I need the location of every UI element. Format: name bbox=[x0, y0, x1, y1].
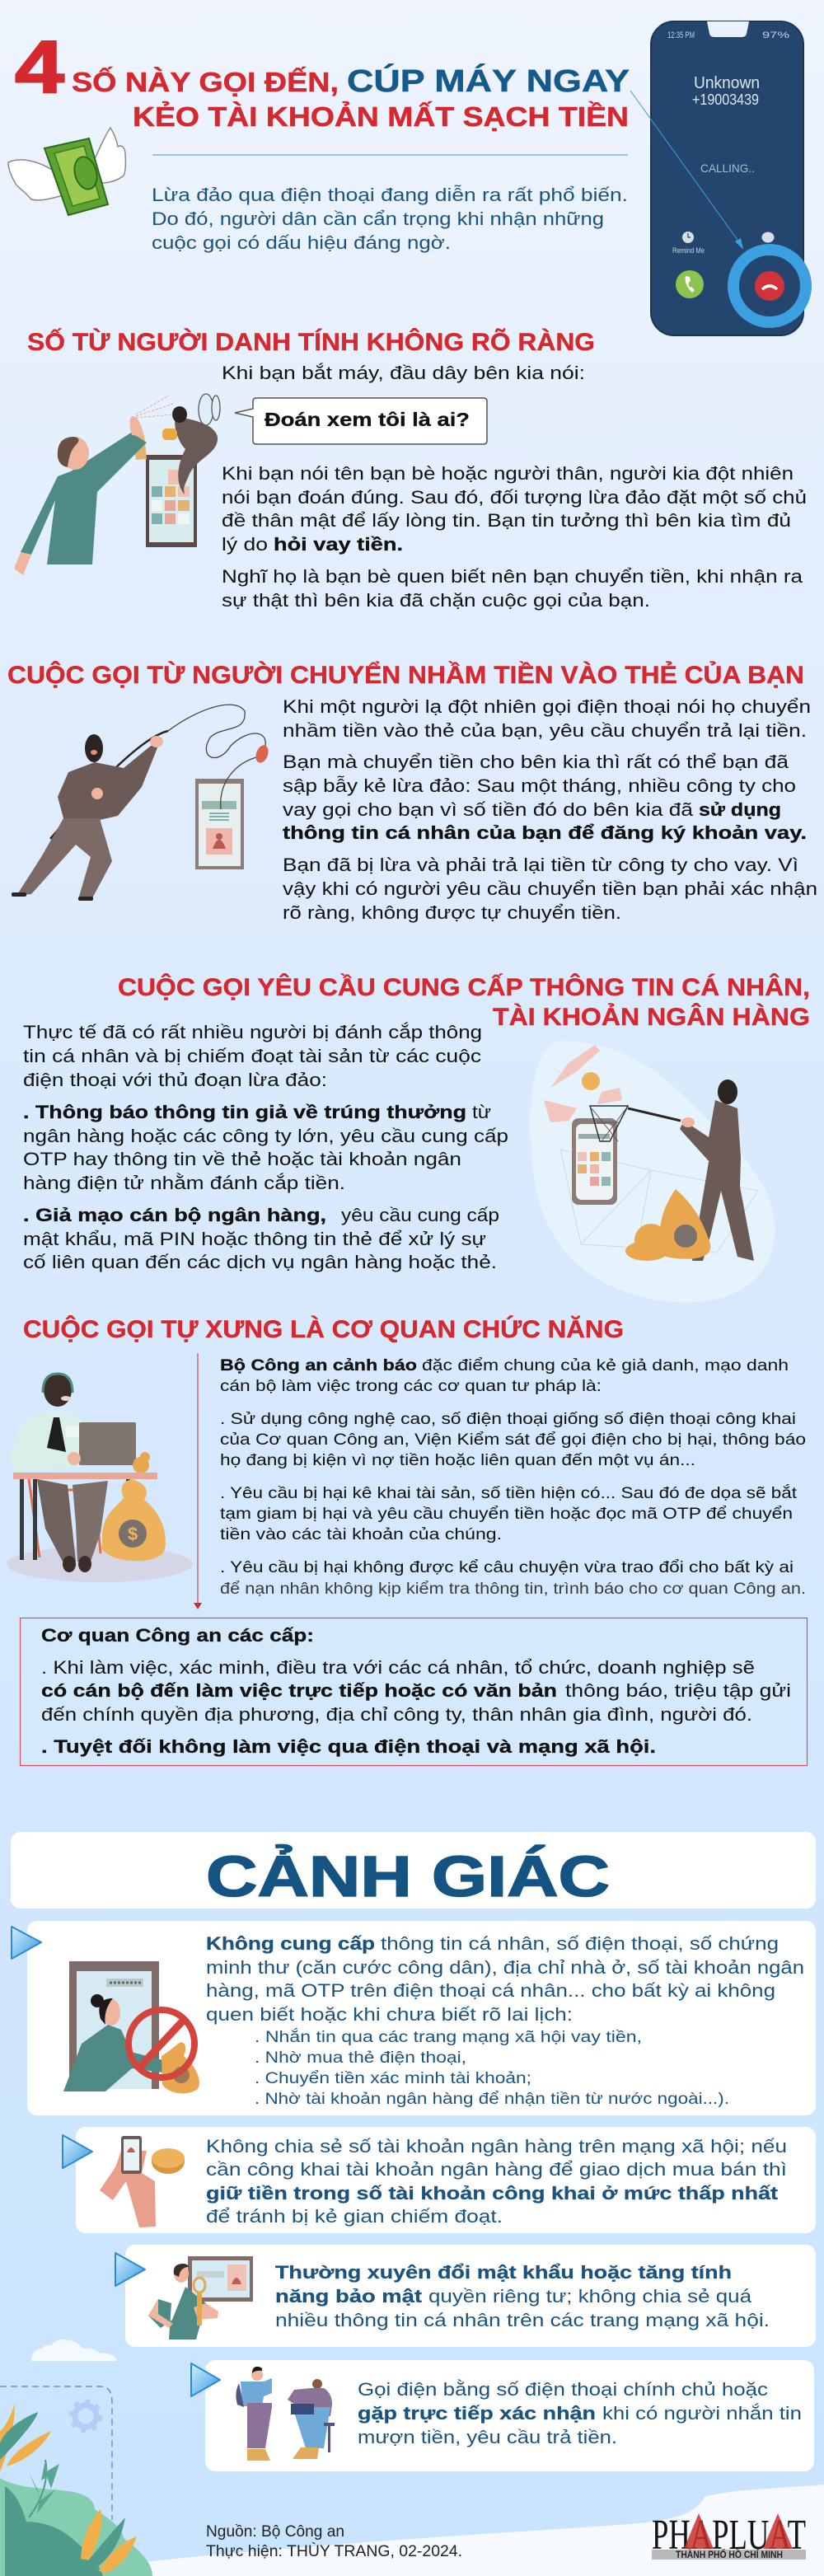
title line 2: KẺO TÀI KHOẢN MẤT SẠCH TIỀN bbox=[133, 101, 629, 132]
body text: hàng điện tử nhằm đánh cắp tiền. bbox=[23, 1173, 345, 1193]
icon: arrow marker bbox=[191, 2363, 220, 2396]
logo: Pháp Luật: THÀNH PHỐ HỒ CHÍ MINH bbox=[676, 2548, 783, 2560]
callout: police notice box: đến chính quyền địa phương, địa chỉ công ty, thân nhân gia đình, người đó. bbox=[41, 1704, 752, 1725]
body text: cán bộ làm việc trong các cơ quan tư pháp là: bbox=[220, 1378, 602, 1395]
icon: phone call screen: 12:35 PM bbox=[667, 30, 695, 40]
icon: arrow marker bbox=[115, 2253, 145, 2286]
icon: phone call screen: Remind Me bbox=[672, 246, 705, 255]
tip text: cần công khai tài khoản ngân hàng để giao dịch mua bán thì bbox=[206, 2159, 787, 2180]
heading: CUỘC GỌI TỪ NGƯỜI CHUYỂN NHẦM TIỀN VÀO THẺ CỦA BẠN bbox=[7, 661, 804, 689]
body text: Nghĩ họ là bạn bè quen biết nên bạn chuyển tiền, khi nhận ra bbox=[222, 566, 803, 587]
body text: . Sử dụng công nghệ cao, số điện thoại giống số điện thoại công khai bbox=[220, 1411, 796, 1428]
arrow: vertical red bbox=[194, 1353, 202, 1609]
icon: flying money bbox=[8, 128, 125, 215]
illustration: plants bottom left bbox=[0, 2404, 152, 2576]
body text: hỏi vay tiền. bbox=[274, 534, 403, 555]
tip text: . Chuyển tiền xác minh tài khoản; bbox=[255, 2070, 531, 2087]
body text: điện thoại với thủ đoạn lừa đảo: bbox=[23, 1070, 327, 1090]
icon: phone call screen: 97% bbox=[762, 30, 789, 40]
icon: arrow marker bbox=[63, 2135, 92, 2168]
callout bubble: Đoán xem tôi là ai? bbox=[265, 409, 470, 430]
illustration: man with key bbox=[148, 2256, 253, 2339]
body text: sử dụng bbox=[699, 799, 781, 820]
illustration: two people talking bbox=[236, 2367, 335, 2461]
panel: unknown identity bbox=[14, 328, 807, 611]
arrow: pointer to hang-up button bbox=[630, 91, 743, 250]
tip text: để tránh bị kẻ gian chiếm đoạt. bbox=[206, 2206, 503, 2227]
body text: Khi bạn nói tên bạn bè hoặc người thân, người kia đột nhiên bbox=[222, 463, 794, 484]
body text: ngân hàng hoặc các công ty lớn, yêu cầu cung cấp bbox=[23, 1126, 508, 1146]
callout bubble bbox=[235, 398, 487, 444]
body text: của Cơ quan Công an, Viện Kiểm sát để gọi điện cho bị hại, thông báo bbox=[220, 1431, 806, 1449]
body text: nhầm tiền vào thẻ của bạn, yêu cầu chuyển trả lại tiền. bbox=[283, 720, 807, 741]
illustration: woman and prohibited sign bbox=[63, 1961, 199, 2093]
tip text: Thường xuyên đổi mật khẩu hoặc tăng tính bbox=[275, 2262, 732, 2283]
tip text: hàng, mã OTP trên điện thoại cá nhân... cho bất kỳ ai không bbox=[206, 1980, 775, 2001]
title line 1 red: SỐ NÀY GỌI ĐẾN, bbox=[72, 66, 339, 97]
source credits: Thực hiện: THÙY TRANG, 02-2024. bbox=[206, 2542, 462, 2560]
illustration: man and fly scammer bbox=[14, 394, 220, 575]
tip text: khi có người nhắn tin bbox=[602, 2403, 802, 2424]
panel: cảnh giác title: CẢNH GIÁC bbox=[206, 1844, 610, 1909]
title line 1 blue: CÚP MÁY NGAY bbox=[347, 63, 630, 99]
body text: Thực tế đã có rất nhiều người bị đánh cắp thông bbox=[23, 1022, 482, 1042]
body text: tiền vào các tài khoản của chúng. bbox=[220, 1526, 502, 1543]
body text: Bạn đã bị lừa và phải trả lại tiền từ công ty cho vay. Vì bbox=[283, 855, 798, 875]
icon: phone call screen: +19003439 bbox=[692, 91, 759, 108]
tip text: quen biết hoặc khi chưa biết rõ lai lịch: bbox=[206, 2004, 573, 2025]
body text: lý do bbox=[222, 534, 268, 555]
body text: từ bbox=[472, 1102, 491, 1122]
tip text: mượn tiền, yêu cầu trả tiền. bbox=[358, 2427, 617, 2447]
tip text: Gọi điện bằng số điện thoại chính chủ hoặc bbox=[358, 2379, 768, 2400]
tip text: nhiều thông tin cá nhân trên các trang mạng xã hội. bbox=[275, 2310, 770, 2330]
callout: police notice box bbox=[20, 1618, 808, 1765]
heading: SỐ TỪ NGƯỜI DANH TÍNH KHÔNG RÕ RÀNG bbox=[27, 328, 595, 356]
body text: rõ ràng, không được tự chuyển tiền. bbox=[283, 902, 621, 923]
illustration: fake officer at desk: $ bbox=[128, 1524, 138, 1544]
body text: tin cá nhân và bị chiếm đoạt tài sản từ các cuộc bbox=[23, 1046, 481, 1066]
tip text bbox=[206, 1933, 804, 2108]
heading: CUỘC GỌI TỰ XƯNG LÀ CƠ QUAN CHỨC NĂNG bbox=[23, 1315, 624, 1343]
body text: họ đang bị kiện vì nợ tiền hoặc liên quan đến một vụ án... bbox=[220, 1452, 695, 1469]
tip text: Không chia sẻ số tài khoản ngân hàng trên mạng xã hội; nếu bbox=[206, 2136, 787, 2157]
tip text: quyền riêng tư; không chia sẻ quá bbox=[428, 2286, 752, 2307]
divider line bbox=[152, 154, 628, 156]
body text: . Yêu cầu bị hại không được kể câu chuyện vừa trao đổi cho bất kỳ ai bbox=[220, 1559, 794, 1576]
body text: đề thân mật để lấy lòng tin. Bạn tin tưởng thì bên kia tìm đủ bbox=[222, 510, 791, 531]
tip text: . Nhắn tin qua các trang mạng xã hội vay tiền, bbox=[255, 2028, 642, 2046]
tip text: gặp trực tiếp xác nhận bbox=[358, 2403, 596, 2424]
tip text: năng bảo mật bbox=[275, 2286, 423, 2307]
tip text: . Nhờ mua thẻ điện thoại, bbox=[255, 2049, 466, 2067]
body text: đặc điểm chung của kẻ giả danh, mạo danh bbox=[422, 1357, 789, 1375]
body text: OTP hay thông tin về thẻ hoặc tài khoản ngân bbox=[23, 1149, 461, 1169]
panel: tip 3 bbox=[115, 2245, 816, 2347]
icon: phone call screen: CALLING.. bbox=[700, 162, 755, 175]
body text: vậy khi có người yêu cầu chuyển tiền bạn phải xác nhận bbox=[283, 878, 817, 899]
body text: mật khẩu, mã PIN hoặc thông tin thẻ để xử lý sự bbox=[23, 1229, 486, 1249]
icon: phone call screen: Unknown bbox=[694, 74, 760, 92]
body text: Khi một người lạ đột nhiên gọi điện thoại nói họ chuyển bbox=[283, 696, 811, 717]
decoration: dashed frame and gear bbox=[0, 2386, 112, 2520]
body text: để nạn nhân không kịp kiểm tra thông tin, trình báo cho cơ quan Công an. bbox=[220, 1581, 806, 1598]
source credits: Nguồn: Bộ Công an bbox=[206, 2523, 344, 2541]
tip text: . Nhờ tài khoản ngân hàng để nhận tiền từ nước ngoài...). bbox=[255, 2091, 729, 2108]
tip text: giữ tiền trong số tài khoản công khai ở mức thấp nhất bbox=[206, 2183, 779, 2204]
heading: CUỘC GỌI YÊU CẦU CUNG CẤP THÔNG TIN CÁ NHÂN, bbox=[118, 973, 810, 1001]
illustration: robber netting data bbox=[531, 1041, 775, 1303]
heading: TÀI KHOẢN NGÂN HÀNG bbox=[493, 1003, 810, 1031]
tip text: minh thư (căn cước công dân), địa chỉ nhà ở, số tài khoản ngân bbox=[206, 1957, 804, 1978]
body text: nói bạn đoán đúng. Sau đó, đối tượng lừa đảo đặt một số chủ bbox=[222, 487, 807, 508]
title bbox=[15, 26, 630, 132]
intro text: cuộc gọi có dấu hiệu đáng ngờ. bbox=[152, 232, 451, 253]
panel: wrong transfer call bbox=[7, 661, 817, 923]
body text bbox=[23, 1022, 508, 1272]
body text: sập bẫy kẻ lừa đảo: Sau một tháng, nhiều công ty cho bbox=[283, 775, 796, 796]
illustration: robber fishing with rod bbox=[12, 705, 270, 901]
intro text: Lừa đảo qua điện thoại đang diễn ra rất phổ biến. bbox=[152, 185, 628, 205]
tip text bbox=[358, 2379, 802, 2447]
body text: . Giả mạo cán bộ ngân hàng, bbox=[23, 1205, 326, 1225]
heading bbox=[118, 973, 810, 1031]
decoration: bottom white wave bbox=[0, 2485, 824, 2576]
source credits bbox=[206, 2523, 462, 2560]
panel: personal info request call bbox=[23, 973, 810, 1303]
illustration: hand with phone and coin bbox=[100, 2136, 185, 2227]
panel: tip 4 bbox=[191, 2360, 814, 2471]
icon: phone call screen bbox=[651, 21, 806, 335]
body text: cố liên quan đến các dịch vụ ngân hàng hoặc thẻ. bbox=[23, 1252, 497, 1272]
intro text bbox=[152, 185, 628, 253]
callout: police notice box: thông báo, triệu tập gửi bbox=[565, 1680, 791, 1701]
body text: vay gọi cho bạn vì số tiền đó do bên kia đã bbox=[283, 799, 694, 820]
body text: . Yêu cầu bị hại kê khai tài sản, số tiền hiện có... Sau đó đe dọa sẽ bắt bbox=[220, 1484, 798, 1502]
tip text bbox=[275, 2262, 770, 2330]
callout: police notice box: Cơ quan Công an các cấp: bbox=[41, 1625, 314, 1646]
body text bbox=[222, 463, 807, 611]
panel: impersonating authorities bbox=[7, 1315, 806, 1609]
panel: tip 2 bbox=[63, 2127, 816, 2233]
callout: police notice box: . Khi làm việc, xác minh, điều tra với các cá nhân, tổ chức, doanh nghiệp sẽ bbox=[41, 1657, 755, 1678]
body text: yêu cầu cung cấp bbox=[341, 1205, 499, 1225]
intro line: Khi bạn bắt máy, đầu dây bên kia nói: bbox=[222, 363, 585, 383]
body text: . Thông báo thông tin giả về trúng thưởng bbox=[23, 1102, 466, 1122]
callout: police notice box: . Tuyệt đối không làm việc qua điện thoại và mạng xã hội. bbox=[41, 1736, 656, 1757]
callout: police notice box: có cán bộ đến làm việc trực tiếp hoặc có văn bản bbox=[41, 1680, 557, 1701]
icon: arrow marker bbox=[12, 1927, 41, 1959]
decoration: cloud bbox=[31, 2339, 117, 2361]
body text: tạm giam bị hại và yêu cầu chuyển tiền hoặc đọc mã OTP để chuyển bbox=[220, 1506, 793, 1523]
tip text: thông tin cá nhân, số điện thoại, số chứng bbox=[381, 1933, 779, 1954]
body text: sự thật thì bên kia đã chặn cuộc gọi của bạn. bbox=[222, 590, 650, 611]
panel: cảnh giác title bbox=[11, 1832, 816, 1909]
panel: tip 1 bbox=[12, 1921, 816, 2115]
tip text: Không cung cấp bbox=[206, 1933, 375, 1954]
body text: thông tin cá nhân của bạn để đăng ký khoản vay. bbox=[283, 822, 807, 843]
body text: Bộ Công an cảnh báo bbox=[220, 1357, 417, 1375]
body text: Bạn mà chuyển tiền cho bên kia thì rất có thể bạn đã bbox=[283, 752, 789, 772]
tip text bbox=[206, 2136, 787, 2227]
body text bbox=[220, 1357, 806, 1598]
illustration: fake officer at desk bbox=[7, 1374, 193, 1582]
big number 4: 4 bbox=[15, 26, 64, 109]
body text bbox=[283, 696, 817, 923]
intro text: Do đó, người dân cần cẩn trọng khi nhận những bbox=[152, 208, 604, 229]
